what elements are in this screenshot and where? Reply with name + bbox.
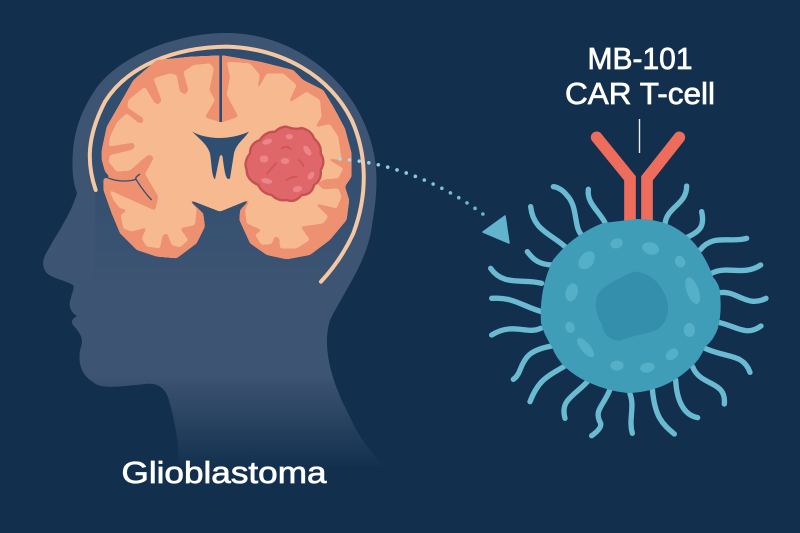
ventricle xyxy=(192,132,249,179)
skull arc xyxy=(90,47,364,282)
brain xyxy=(102,55,352,259)
head silhouette xyxy=(43,33,385,468)
cell body xyxy=(541,219,721,393)
brain white matter xyxy=(108,62,343,248)
tumor xyxy=(246,127,323,201)
CAR receptor xyxy=(597,137,679,227)
arrowhead xyxy=(483,216,509,243)
lateral fissure xyxy=(105,174,152,200)
dotted arrow path xyxy=(340,159,488,218)
label: MB-101 CAR T-cell: CAR T-cell xyxy=(565,76,715,111)
pointer line xyxy=(638,119,640,153)
cell nucleus xyxy=(596,272,668,341)
label: MB-101 CAR T-cell: MB-101 xyxy=(588,41,692,76)
cell vesicles xyxy=(563,236,703,374)
label: Glioblastoma: Glioblastoma xyxy=(122,455,327,490)
brain outer cortex xyxy=(102,55,352,259)
skull interior xyxy=(90,47,364,287)
longitudinal fissure xyxy=(217,55,225,122)
cell tendrils xyxy=(491,186,766,436)
